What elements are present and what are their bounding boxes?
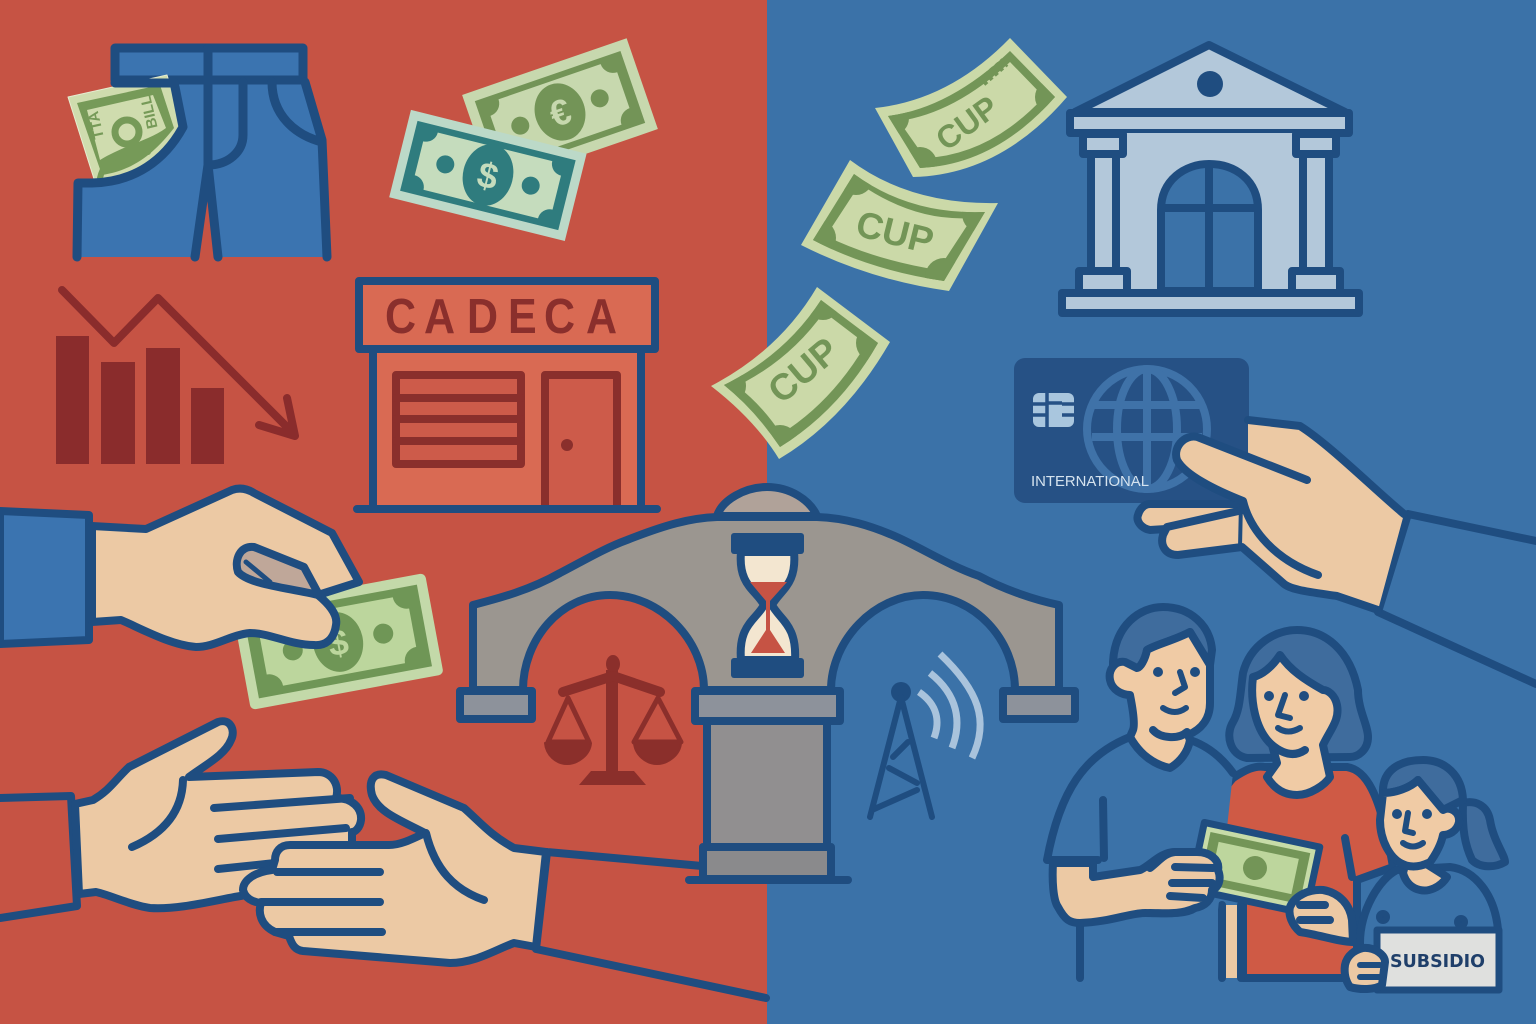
icon: signal waves	[919, 654, 980, 758]
icon: card chip	[1033, 393, 1074, 427]
person: girl	[1360, 760, 1505, 960]
icon: family with banknote and subsidy sign	[1047, 607, 1505, 990]
icon: hourglass	[731, 533, 804, 678]
icon: flying CUP banknote lower	[708, 286, 894, 463]
icon: banknote in pocket: BILL	[137, 94, 162, 130]
icon: jeans pocket with banknote	[68, 48, 327, 257]
icon: open hand left	[0, 721, 361, 918]
icon: globe	[1087, 369, 1207, 489]
icon: open hand right	[243, 774, 766, 998]
icon: stone bridge	[460, 487, 1075, 880]
sign: SUBSIDIO	[1377, 930, 1499, 990]
icon: dollar banknote: $	[473, 153, 503, 198]
icon: hand holding card	[1138, 420, 1536, 684]
text: note lettering: TTA	[85, 109, 108, 141]
text: CUP: CUP	[929, 89, 1005, 157]
icon: signal tower	[870, 654, 980, 817]
icon: CADECA exchange shop	[357, 281, 657, 509]
icon: flying CUP banknote middle	[798, 160, 1000, 296]
person: girl's hand	[1345, 948, 1385, 989]
heading: CADECA sign: CADECA	[385, 288, 617, 344]
icon: dollar note held	[238, 578, 438, 705]
text: CUP: CUP	[760, 330, 846, 411]
icon: international credit card	[1014, 358, 1249, 503]
text: CUP: CUP	[852, 203, 938, 262]
text: SUBSIDIO: SUBSIDIO	[1390, 951, 1485, 972]
icon: dollar banknote	[394, 114, 581, 237]
icon: dollar note held: $	[325, 621, 352, 664]
icon: euro banknote: €	[544, 90, 576, 135]
icon: scales of justice	[545, 655, 681, 785]
text: INTERNATIONAL: INTERNATIONAL	[1031, 473, 1149, 490]
person: woman's hand	[1289, 890, 1353, 942]
icon: euro banknote	[468, 43, 652, 181]
panel: red left background	[0, 0, 767, 1024]
icon: banknote in pocket	[68, 75, 183, 182]
panel: blue right background	[767, 0, 1536, 1024]
person: woman	[1215, 630, 1393, 978]
person: man	[1047, 607, 1233, 978]
icon: flying CUP banknote top	[875, 38, 1069, 181]
icon: family banknote	[1190, 822, 1320, 914]
icon: bank building	[1062, 45, 1359, 313]
chart: falling bar chart with arrow	[56, 290, 295, 464]
icon: hand holding dollar banknote	[0, 489, 438, 705]
person: man's hand on note	[1150, 852, 1220, 913]
